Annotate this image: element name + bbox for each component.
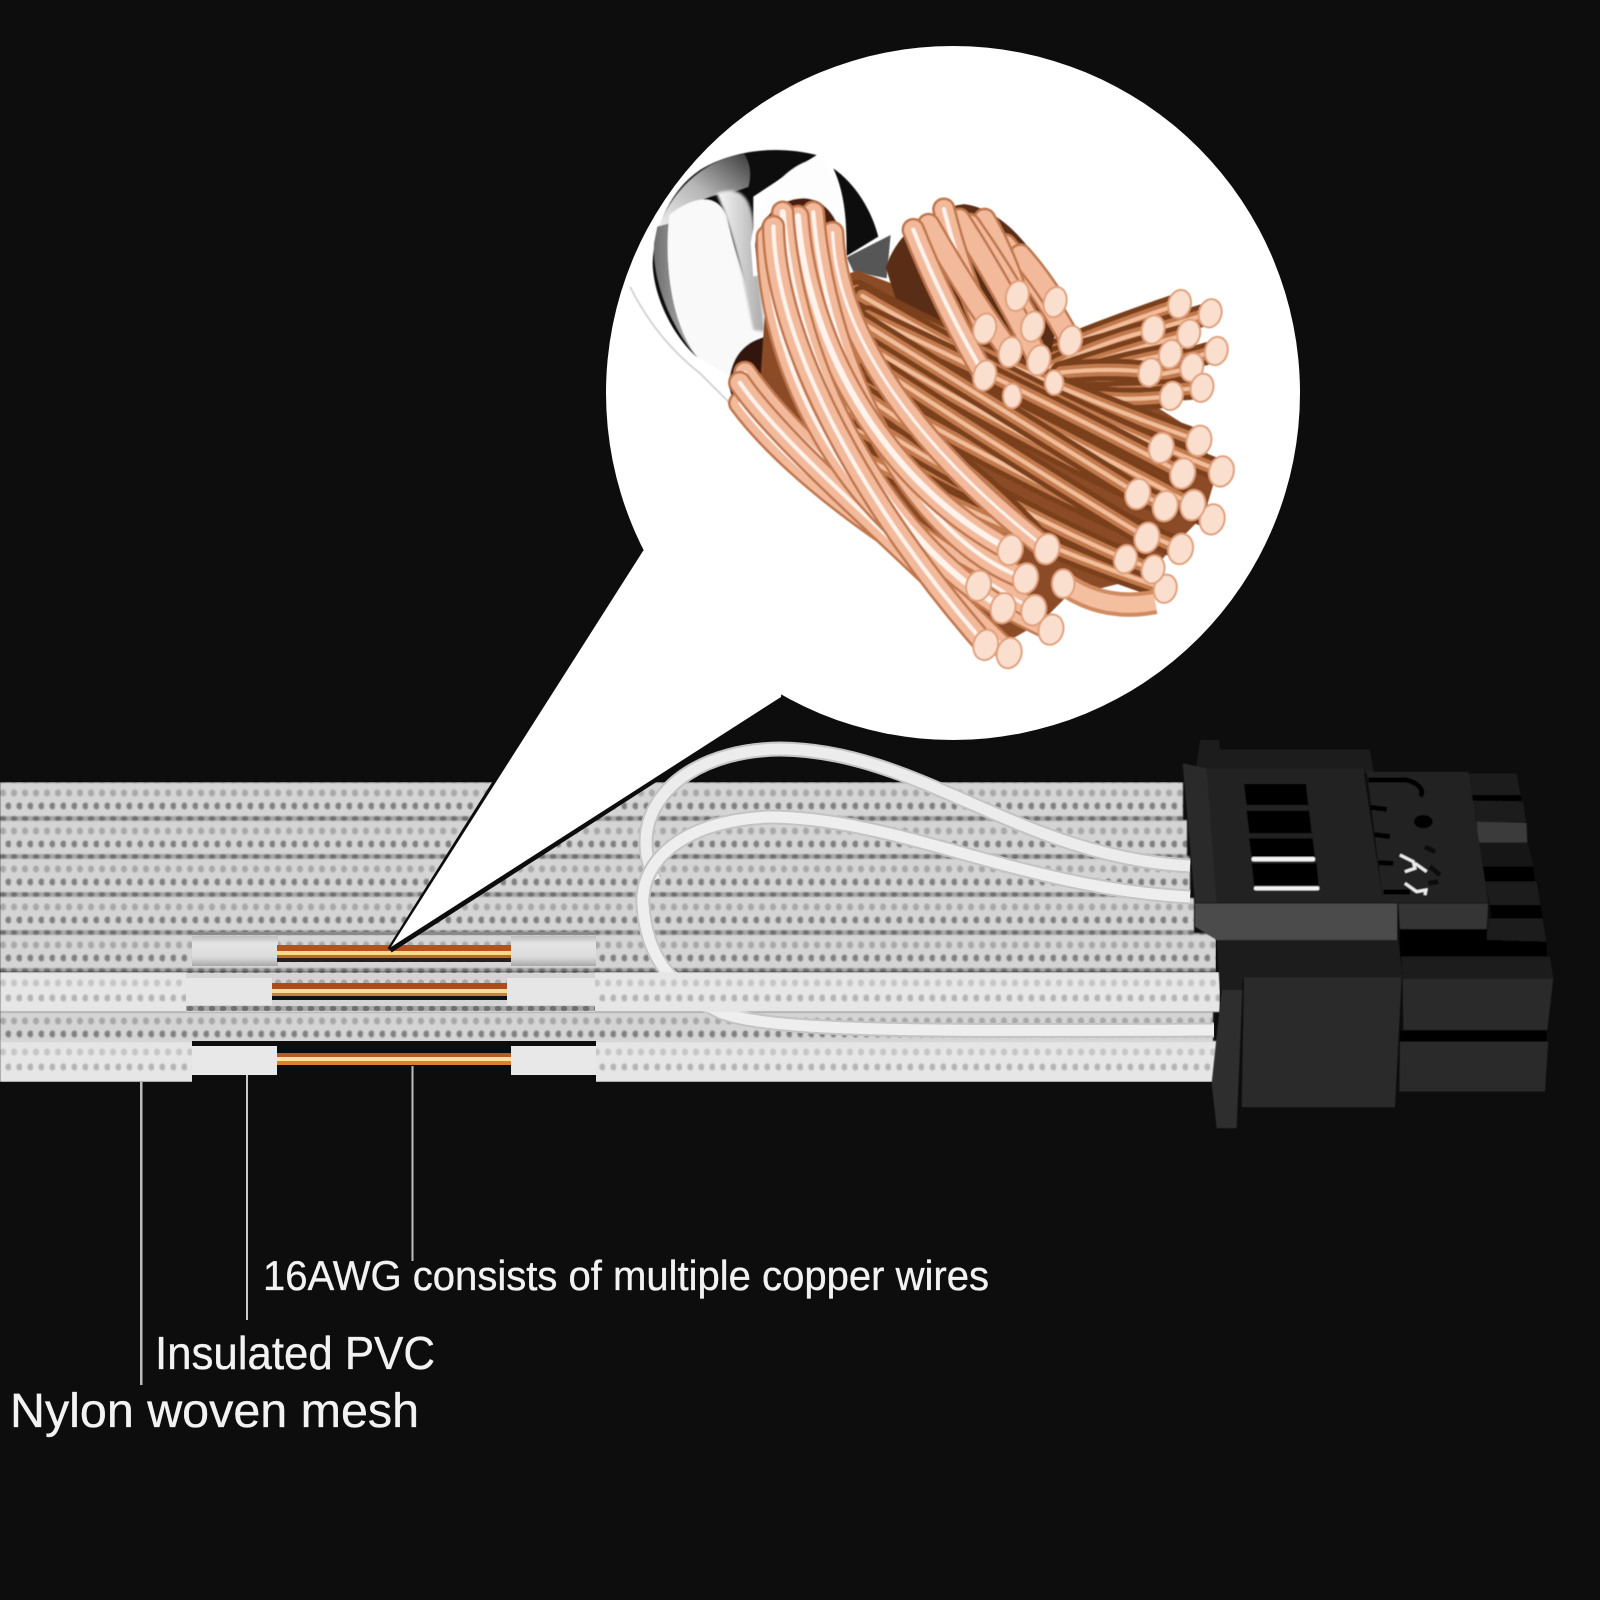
connector left side face [1183,763,1217,903]
bundle backing [760,270,1216,643]
copper wire illustration [740,204,1237,671]
connector top face [1207,768,1383,903]
connector top face right [1367,772,1488,903]
connector rear latch [1197,740,1374,773]
cable row 8 [0,1041,1217,1082]
front strand cluster [767,212,1063,663]
upper opening [755,198,847,283]
connector front lip [1195,903,1397,940]
right-top strand cluster [1051,287,1231,413]
wire sheath [630,150,891,425]
label: 16AWG copper wires: 16AWG consists of multiple copper wires [263,1252,989,1299]
callout circle [606,46,1300,740]
cable row 4 [0,898,1194,934]
front cable rows [0,972,1220,1082]
connector black gap [1400,1031,1547,1041]
sheath outer edge line [630,287,730,403]
connector retaining tab [1212,990,1242,1128]
stripped section: upper cable [192,932,596,966]
sheath upper reflection [657,154,750,230]
connector embossed marks [1368,780,1440,895]
cable row 3 [0,856,1190,899]
cable row 7 [0,1012,1213,1042]
top cluster backing [886,204,1061,378]
callout magnifier bubble [390,46,1300,950]
sheath highlight [668,200,763,377]
cable row 6 [0,972,1220,1012]
sheath dark cavity [653,150,817,357]
wire 1 [646,749,1190,880]
sheath side reflection [654,223,696,356]
connector main block [1242,977,1402,1107]
connector right shelf [1402,957,1553,978]
sheath inner shade [717,191,765,332]
connector [1183,740,1553,1128]
cable row 2 [0,820,1187,857]
cable row 1 [0,782,1183,821]
label: insulated PVC: Insulated PVC [155,1327,435,1379]
wire 1 outline [646,749,1190,880]
connector right upper block [1403,979,1553,1030]
connector recess band [1400,929,1547,957]
leader line: insulated PVC [246,1075,248,1320]
connector lower shelf [1217,940,1403,990]
lower opening [729,337,793,425]
connector right lower block [1399,1042,1548,1092]
callout pointer outline [390,548,786,950]
sheath ring [751,158,845,277]
stripped section: middle cable [186,972,595,1012]
stripped section: lower cable [192,1041,596,1084]
top strand cluster [913,209,1085,408]
lower-left strand bundle [740,372,1067,671]
wire 2 outline [643,817,1214,1030]
white thin wires loop [643,749,1214,1030]
connector stacked side pins [1468,773,1547,942]
label: nylon woven mesh: Nylon woven mesh [10,1385,419,1438]
cable row 5 [0,933,1216,972]
sheath grey wedge [847,235,891,278]
connector latch windows [1244,784,1319,890]
leader line: copper wires [412,1066,414,1261]
back cable rows [0,782,1216,1042]
middle strand cluster [847,291,1237,605]
wire 2 [643,817,1214,1030]
connector front lip right [1398,903,1488,929]
sheath right cavity [833,168,878,256]
leader line: nylon woven mesh [140,1082,142,1385]
callout pointer [391,400,800,947]
